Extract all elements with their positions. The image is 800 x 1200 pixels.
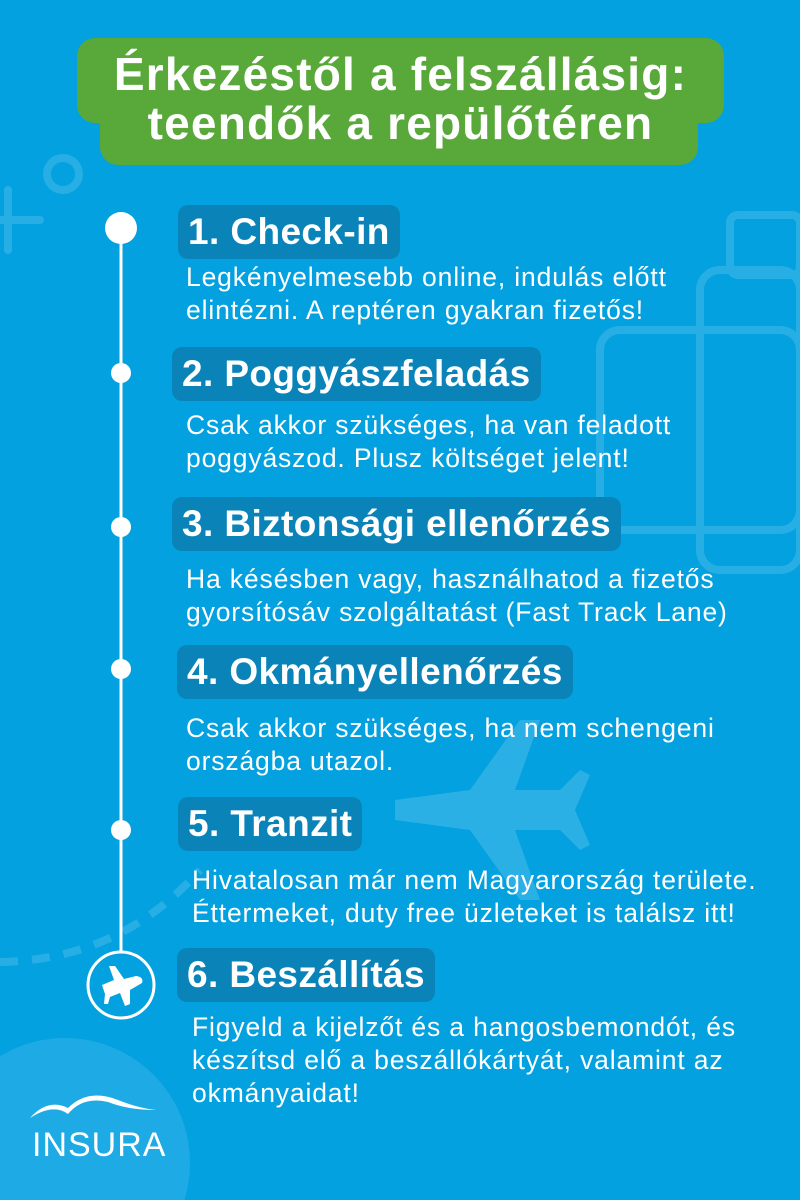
text: Csak akkor szükséges, ha nem schengeni [186,713,715,743]
step 6: 6. Beszállítás [187,954,425,995]
text: Figyeld a kijelzőt és a hangosbemondót, és [192,1012,736,1042]
timeline [86,212,156,1020]
step 4: 4. Okmányellenőrzés [187,651,563,692]
title: teendők a repülőtéren [148,97,653,149]
text: okmányaidat! [192,1078,360,1108]
title: Érkezéstől a felszállásig: [114,48,687,100]
text: Ha késésben vagy, használhatod a fizetős [186,564,714,594]
text: készítsd elő a beszállókártyát, valamint az [192,1045,723,1075]
text: országba utazol. [186,746,394,776]
logo [0,1038,190,1200]
text: elintézni. A reptéren gyakran fizetős! [186,295,644,325]
text: poggyászod. Plusz költséget jelent! [186,443,630,473]
icon: plane [88,952,154,1018]
step 1: 1. Check-in [188,211,390,252]
text: Hivatalosan már nem Magyarország területe. [192,865,756,895]
text: Éttermeket, duty free üzleteket is találsz itt! [192,898,736,928]
step 3: 3. Biztonsági ellenőrzés [182,503,611,544]
step 5: 5. Tranzit [188,803,352,844]
step 5 [178,797,362,851]
step 1 [178,205,400,259]
text: Csak akkor szükséges, ha van feladott [186,410,671,440]
text: gyorsítósáv szolgáltatást (Fast Track Lane) [186,597,728,627]
title [77,38,724,165]
logo: INSURA [32,1126,166,1164]
step 2: 2. Poggyászfeladás [182,353,531,394]
text: Legkényelmesebb online, indulás előtt [186,262,667,292]
